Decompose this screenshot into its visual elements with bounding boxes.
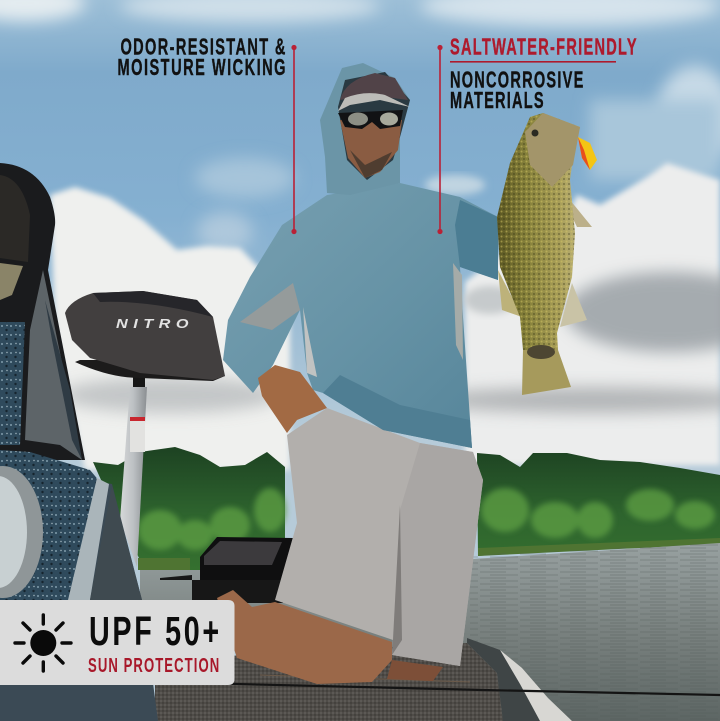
callout: saltwater friendly: SALTWATER-FRIENDLY: [450, 34, 637, 61]
seat logo: NITRO: [116, 317, 189, 332]
callout: saltwater friendly: MATERIALS: [450, 88, 544, 114]
hood: [320, 63, 410, 195]
clouds: [50, 163, 720, 470]
shorts: [275, 408, 483, 666]
callout: odor resistant: ODOR-RESISTANT &: [120, 34, 285, 61]
callout: saltwater friendly: [437, 34, 637, 234]
badge: UPF 50+ sun protection: [0, 600, 234, 685]
face: [340, 120, 402, 178]
fish body: [497, 113, 580, 350]
fishing lure: [578, 137, 597, 170]
boat seat: [65, 291, 225, 567]
lake water: [140, 543, 720, 721]
callout: odor resistant: MOISTURE WICKING: [118, 55, 286, 81]
cap: [340, 73, 408, 100]
tree line: [93, 447, 720, 570]
fish finder display: [160, 537, 293, 603]
sunglasses: [338, 110, 403, 129]
boat console left: [0, 163, 158, 721]
legs and feet: [217, 590, 443, 684]
largemouth bass: [497, 113, 597, 395]
badge subheading: SUN PROTECTION: [88, 653, 219, 677]
icon: sun: [15, 615, 71, 671]
fishing rods: [155, 675, 720, 695]
hand on knee: [258, 365, 327, 433]
shirt body: [223, 183, 498, 448]
man in hooded shirt: [217, 63, 498, 684]
badge heading: UPF 50+: [89, 609, 219, 654]
boat deck: [155, 638, 572, 721]
callout: saltwater friendly: NONCORROSIVE: [450, 67, 583, 94]
fish fins: [498, 188, 592, 395]
callout: odor resistant: [118, 34, 297, 234]
